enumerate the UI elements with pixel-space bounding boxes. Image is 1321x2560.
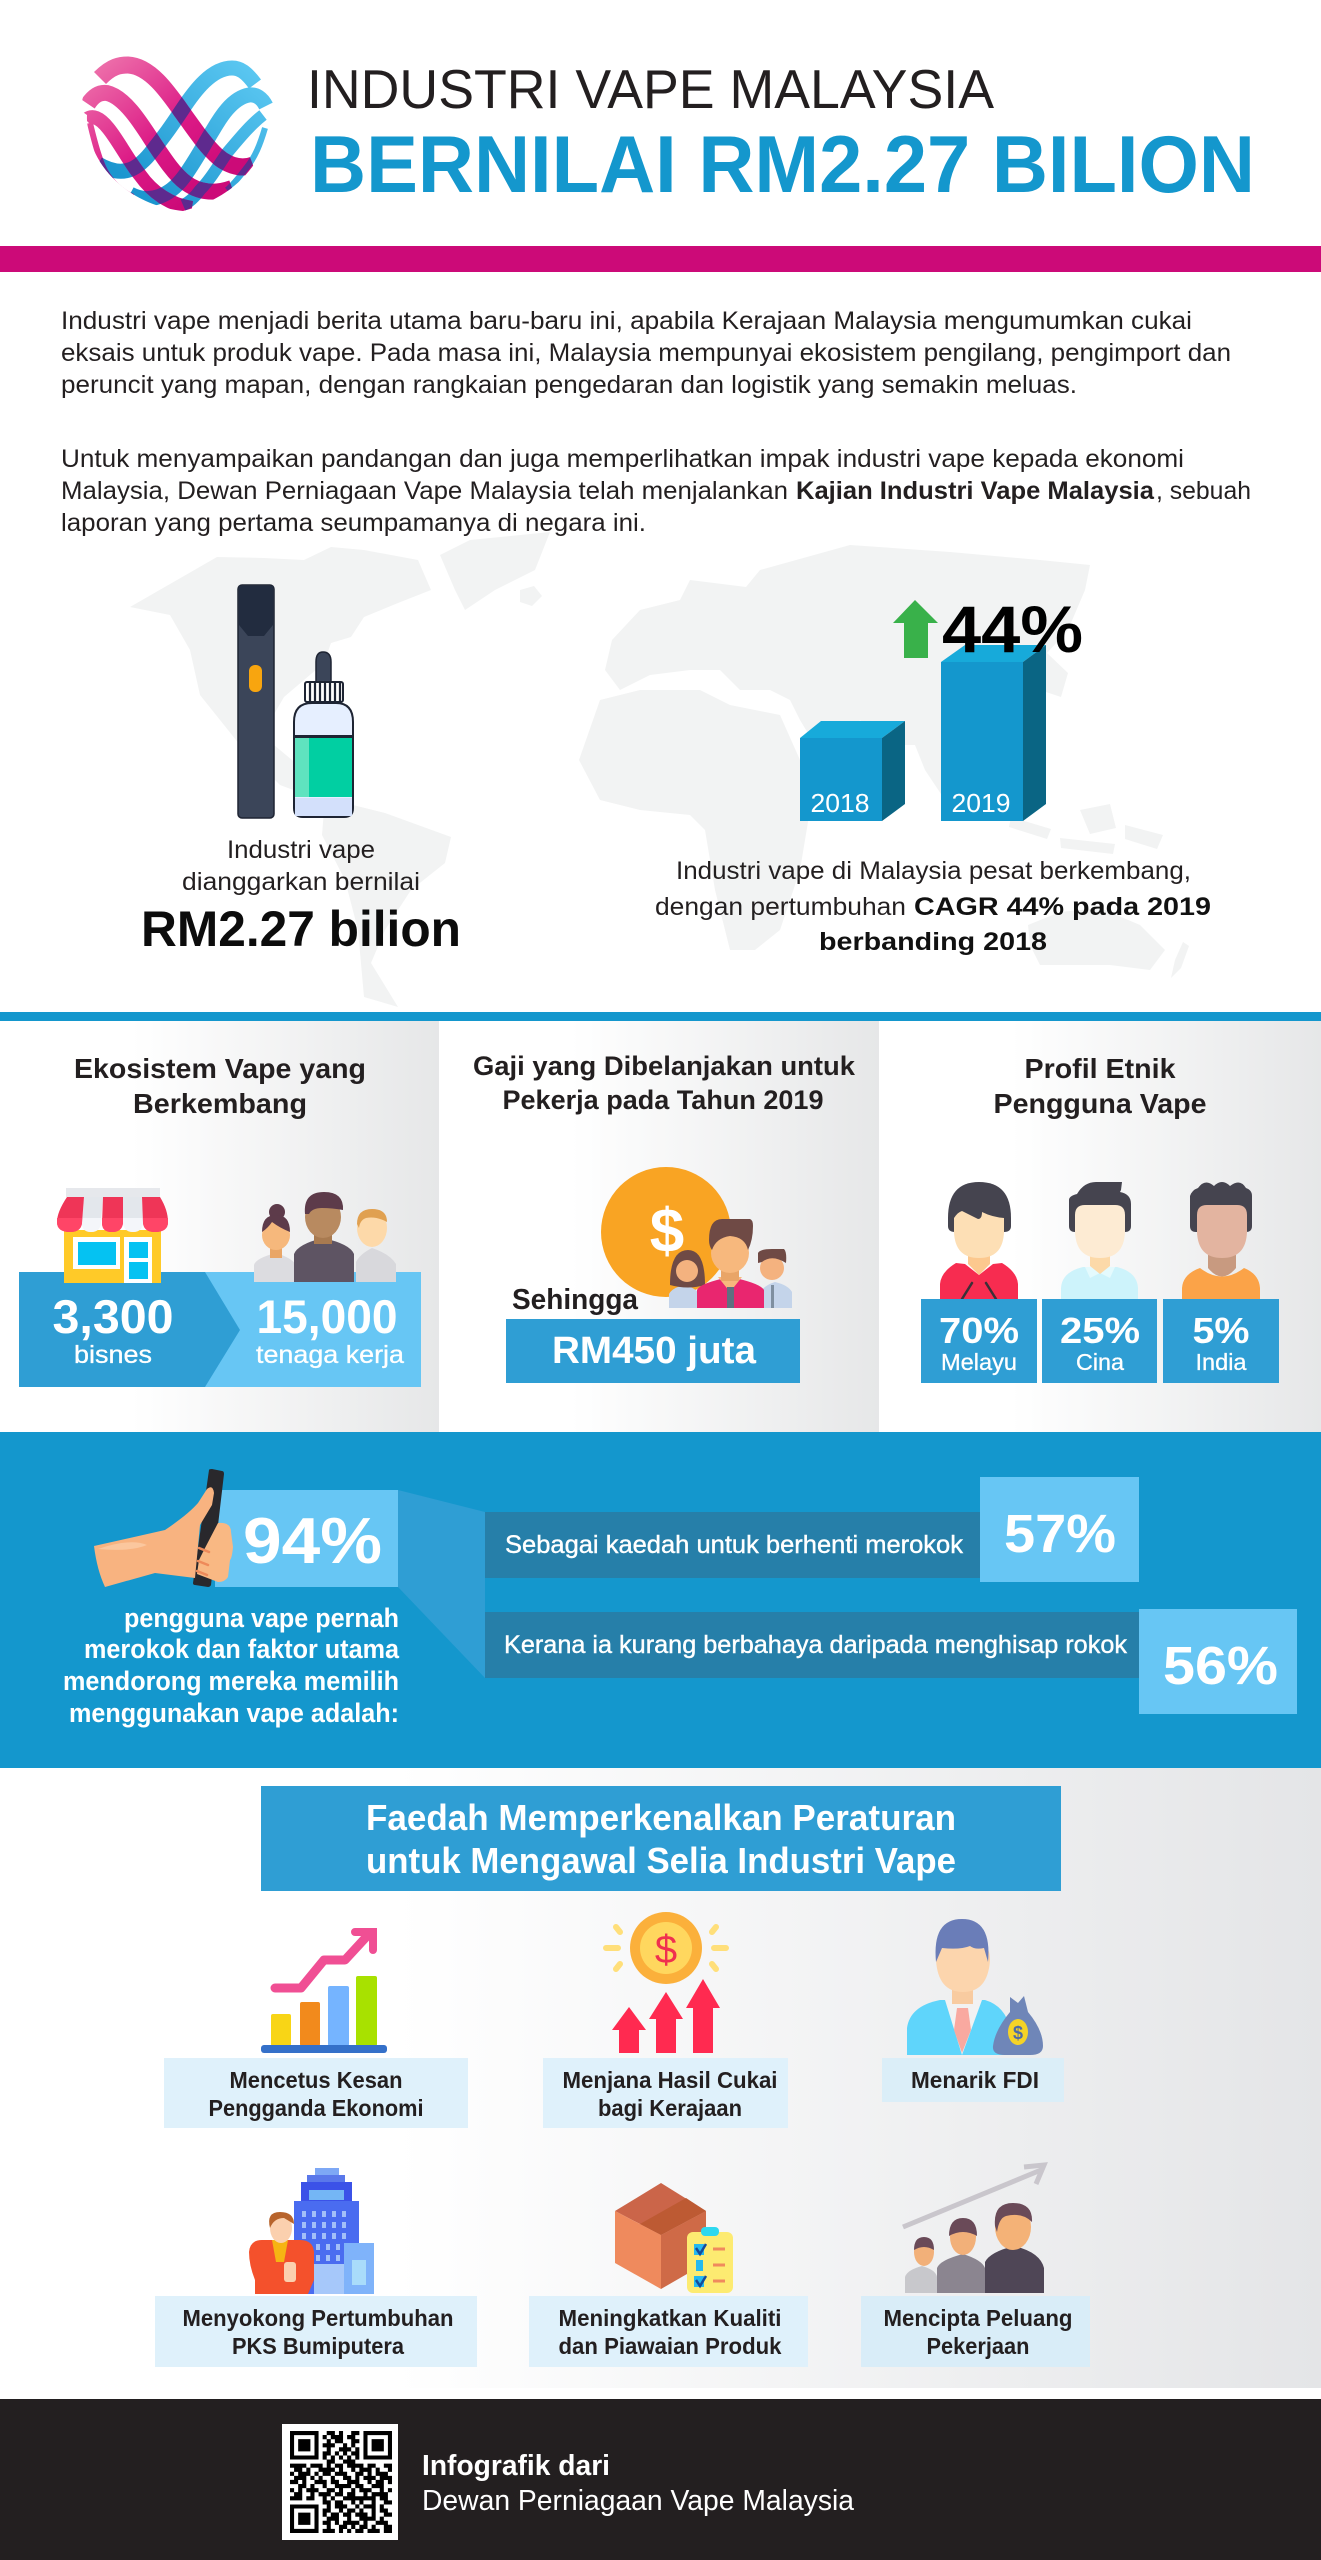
stat box: RM450 juta — [506, 1319, 800, 1383]
label: bumiputera SMEs: PKS Bumiputera — [232, 2333, 404, 2359]
growth description — [655, 857, 1211, 956]
label: tax revenue: Menjana Hasil Cukai — [562, 2067, 778, 2093]
heading: ecosystem — [74, 1053, 366, 1119]
growth figure 44%: 44% — [942, 592, 1083, 666]
heading: ecosystem: Ekosistem Vape yang — [74, 1053, 366, 1084]
label: FDI: Menarik FDI — [911, 2067, 1039, 2093]
icon: e-liquid bottle — [294, 652, 353, 817]
intro paragraph 2: , sebuah — [1156, 477, 1251, 505]
intro paragraph 1: Industri vape menjadi berita utama baru-baru ini, apabila Kerajaan Malaysia mengumumkan cukai — [61, 307, 1192, 335]
stat band: businesses and workers: 15,000 — [256, 1290, 398, 1343]
stat box: Cina 25% — [1042, 1299, 1157, 1383]
stat box: India 5%: India — [1196, 1349, 1247, 1375]
connector wedge — [398, 1490, 485, 1678]
panel: ecosystem — [0, 1021, 439, 1432]
growth description: berbanding 2018 — [819, 928, 1047, 956]
label: tax revenue: bagi Kerajaan — [598, 2095, 742, 2121]
intro paragraph 1: peruncit yang mapan, dengan rangkaian pengedaran dan logistik yang semakin meluas. — [61, 371, 1077, 399]
stat box: RM450 juta: RM450 juta — [552, 1330, 757, 1372]
credit text — [422, 2450, 855, 2517]
icon: businessman with money bag — [907, 1919, 1043, 2055]
heading: salaries — [473, 1051, 856, 1115]
logo: woven ball — [86, 65, 266, 208]
intro paragraph 1 — [61, 307, 1231, 399]
icon: Indian user — [1182, 1182, 1260, 1299]
icon: box and checklist — [615, 2183, 733, 2293]
label: product quality: Meningkatkan Kualiti — [558, 2305, 782, 2331]
stat box: Melayu 70% — [921, 1299, 1037, 1383]
bar chart: 2018 vs 2019 — [800, 645, 1046, 821]
stat band: businesses and workers: bisnes — [74, 1341, 152, 1369]
icon: green up arrow — [893, 600, 938, 658]
stat band: businesses and workers: tenaga kerja — [256, 1341, 404, 1369]
label: job creation: Mencipta Peluang — [884, 2305, 1072, 2331]
market value callout: RM2.27 bilion — [141, 901, 461, 957]
market value callout: dianggarkan bernilai — [182, 868, 420, 896]
icon: coin with staff: $ — [650, 1197, 684, 1266]
icon: entrepreneur and tower — [249, 2168, 374, 2294]
label: economic multiplier: Pengganda Ekonomi — [208, 2095, 424, 2121]
title: BERNILAI RM2.27 BILION — [310, 120, 1255, 210]
label: job creation — [861, 2296, 1090, 2367]
heading: ethnic profile: Profil Etnik — [1024, 1053, 1176, 1084]
intro paragraph 2 — [61, 445, 1251, 537]
label: economic multiplier: Mencetus Kesan — [230, 2067, 402, 2093]
panel: salaries — [439, 1021, 879, 1432]
market value callout — [141, 836, 461, 957]
icon: job growth people — [903, 2165, 1044, 2293]
intro paragraph 2: Untuk menyampaikan pandangan dan juga memperlihatkan impak industri vape kepada ekonomi — [61, 445, 1184, 473]
bar chart: 2018 vs 2019: 2019 — [952, 788, 1010, 818]
panel: benefits of regulation — [0, 1768, 1321, 2388]
stat box: Melayu 70%: Melayu — [941, 1349, 1017, 1375]
pink divider bar — [0, 246, 1321, 272]
QR code — [282, 2424, 398, 2540]
heading: salaries: Gaji yang Dibelanjakan untuk — [473, 1051, 856, 1081]
smoker description: merokok dan faktor utama — [84, 1634, 400, 1664]
credit text: Dewan Perniagaan Vape Malaysia — [422, 2485, 855, 2517]
label: product quality: dan Piawaian Produk — [558, 2333, 782, 2359]
label: sehingga: Sehingga — [512, 1284, 639, 1316]
label: FDI — [882, 2058, 1064, 2102]
label: bumiputera SMEs — [155, 2296, 477, 2367]
reason 2: less harmful 56%: 56% — [1163, 1636, 1278, 1696]
growth description: CAGR 44% pada 2019 — [914, 893, 1211, 921]
market value callout: Industri vape — [227, 836, 375, 864]
icon: Malay user — [940, 1182, 1018, 1299]
icon: coin with staff — [601, 1167, 792, 1308]
intro paragraph 2: Malaysia, Dewan Perniagaan Vape Malaysia telah menjalankan — [61, 477, 788, 505]
reason 1: quit smoking 57%: Sebagai kaedah untuk berhenti merokok — [505, 1531, 964, 1559]
stat band: businesses and workers — [19, 1272, 421, 1387]
smoker description — [63, 1603, 400, 1728]
intro paragraph 2: laporan yang pertama seumpamanya di negara ini. — [61, 509, 646, 537]
reason 2: less harmful 56%: Kerana ia kurang berbahaya daripada menghisap rokok — [504, 1631, 1128, 1659]
icon: rising bar chart — [261, 1932, 387, 2053]
world map background — [130, 532, 1189, 1007]
bar chart: 2018 vs 2019: 2018 — [810, 788, 870, 818]
smoker description: mendorong mereka memilih — [63, 1666, 399, 1696]
stat band: businesses and workers: 3,300 — [52, 1290, 174, 1343]
icon: coin and red arrows — [606, 1912, 726, 2053]
banner heading: untuk Mengawal Selia Industri Vape — [366, 1840, 956, 1881]
icon: coin and red arrows: $ — [655, 1928, 677, 1972]
heading: ecosystem: Berkembang — [133, 1088, 307, 1119]
blue divider bar — [0, 1012, 1321, 1021]
credit text: Infografik dari — [422, 2450, 610, 2482]
icon: Chinese user — [1061, 1182, 1138, 1299]
banner heading — [261, 1786, 1061, 1891]
title: INDUSTRI VAPE MALAYSIA — [307, 58, 994, 120]
panel: ethnic profile — [879, 1021, 1321, 1432]
icon: workers group — [254, 1192, 396, 1282]
smoker description: menggunakan vape adalah: — [69, 1698, 399, 1728]
reason 2: less harmful 56% — [485, 1609, 1297, 1714]
label: job creation: Pekerjaan — [926, 2333, 1030, 2359]
intro paragraph 1: eksais untuk produk vape. Pada masa ini, Malaysia mempunyai ekosistem pengilang, pengimport dan — [61, 339, 1231, 367]
heading: salaries: Pekerja pada Tahun 2019 — [502, 1085, 824, 1115]
banner heading: Faedah Memperkenalkan Peraturan — [366, 1797, 956, 1838]
heading: ethnic profile — [994, 1053, 1206, 1119]
label: tax revenue — [543, 2058, 788, 2128]
heading: ethnic profile: Pengguna Vape — [994, 1088, 1206, 1119]
stat box: Cina 25%: 25% — [1060, 1310, 1140, 1351]
stat box: 94% — [215, 1490, 398, 1587]
stat box: India 5% — [1163, 1299, 1279, 1383]
growth description: Industri vape di Malaysia pesat berkembang, — [676, 857, 1191, 885]
icon: shop — [57, 1188, 168, 1283]
icon: businessman with money bag: $ — [1013, 2023, 1023, 2043]
title — [307, 58, 1255, 210]
smoker description: pengguna vape pernah — [124, 1603, 399, 1633]
reason 1: quit smoking 57% — [485, 1477, 1139, 1582]
growth description: dengan pertumbuhan — [655, 893, 906, 921]
stat box: India 5%: 5% — [1192, 1310, 1250, 1351]
stat box: 94%: 94% — [243, 1504, 382, 1577]
stat box: Melayu 70%: 70% — [939, 1310, 1019, 1351]
label: bumiputera SMEs: Menyokong Pertumbuhan — [182, 2305, 454, 2331]
intro paragraph 2: Kajian Industri Vape Malaysia — [796, 477, 1155, 505]
reason 1: quit smoking 57%: 57% — [1004, 1504, 1116, 1564]
label: product quality — [529, 2296, 808, 2367]
label: economic multiplier — [164, 2058, 468, 2128]
stat box: Cina 25%: Cina — [1076, 1349, 1124, 1375]
panel: smokers and reasons — [0, 1432, 1321, 1768]
icon: vape pen — [238, 585, 274, 818]
panel: footer — [0, 2399, 1321, 2560]
icon: hand holding vape — [94, 1469, 233, 1587]
